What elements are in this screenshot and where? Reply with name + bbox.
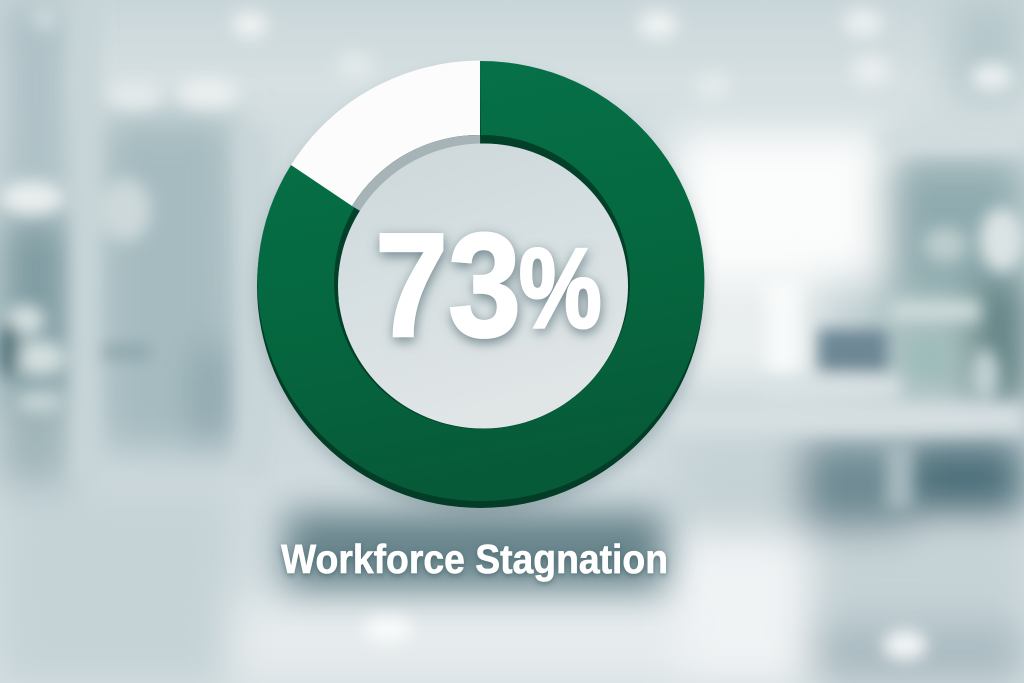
caption: Workforce Stagnation: Workforce Stagnation: [281, 536, 668, 582]
inner bevel: dark green part: [334, 135, 630, 429]
donut depth edge: [257, 64, 704, 508]
caption shadow band: [285, 512, 665, 588]
light rim at the bottom of the opening: [339, 300, 626, 422]
value: 73%: %: [519, 224, 602, 351]
white segment: [291, 60, 480, 206]
value: 73%: 73: [375, 202, 521, 368]
green segment: [257, 61, 704, 501]
donut drop shadow: [257, 70, 705, 514]
value: 73%: [375, 202, 602, 368]
inner bevel: grey part under white segment: [352, 135, 482, 286]
donut chart: [257, 60, 705, 514]
donut center: [338, 144, 628, 428]
